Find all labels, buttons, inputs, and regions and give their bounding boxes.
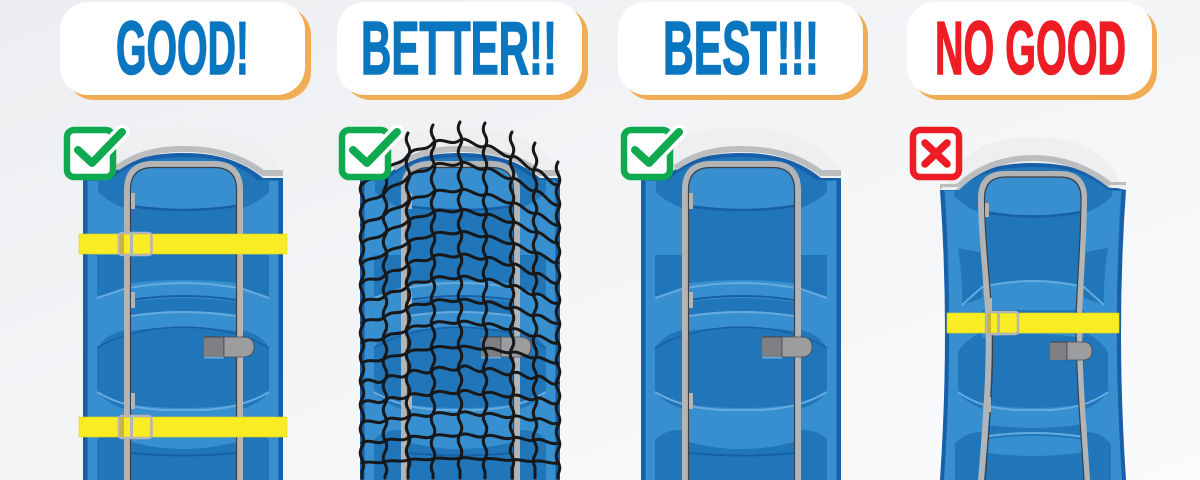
portable toilet crushed by one strap — [940, 137, 1126, 480]
portable toilet with no straps — [641, 127, 841, 480]
label bubble: best: BEST!!! — [663, 6, 819, 90]
portable toilet with two straps — [79, 127, 287, 480]
label bubble: no good — [907, 2, 1157, 100]
icon: green check — [342, 130, 397, 177]
portable toilet under cargo net — [360, 122, 560, 480]
label bubble: good: GOOD! — [116, 6, 249, 90]
icon: red cross — [913, 130, 959, 177]
icon: green check — [624, 130, 679, 177]
label bubble: better: BETTER!! — [361, 6, 557, 90]
cargo net — [360, 122, 560, 478]
panel: better — [337, 2, 588, 480]
panel: best — [618, 2, 868, 480]
label bubble: best — [618, 2, 868, 100]
label bubble: good — [60, 2, 311, 100]
panel: no good — [907, 2, 1157, 480]
panel: good — [60, 2, 311, 480]
icon: green check — [67, 130, 122, 177]
label bubble: better — [337, 2, 588, 100]
